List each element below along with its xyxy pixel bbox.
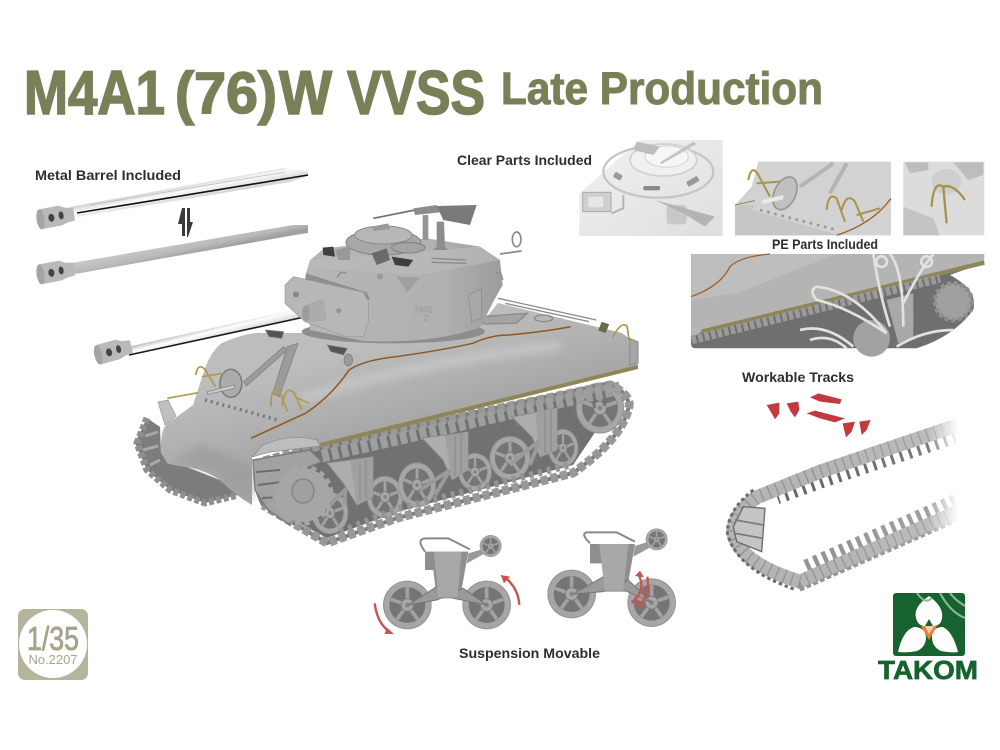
drive sprocket [276,468,330,522]
scale badge [18,609,88,680]
scale badge: No.2207 [28,652,78,667]
icon: swap arrows [178,208,193,237]
track interior [255,383,625,538]
turret: 2 [424,313,429,322]
hull highlight [300,345,560,400]
machine gun [373,205,477,250]
watermark swirls [800,254,953,348]
commander cupola [323,223,467,267]
scale badge: 1/35 [27,620,79,657]
title: Late Production [501,63,823,114]
front track links [253,450,322,525]
title: M4A1 [24,59,165,128]
road wheels [312,429,590,535]
turret number: 2401 [414,305,433,314]
gun barrel [127,307,309,356]
PE parts inset: fender [691,254,984,357]
nose shading [172,445,252,500]
title: W [279,59,332,128]
clear parts inset: turret top [579,140,723,236]
suspension diagrams [375,528,676,634]
front hull rivets [205,400,278,420]
workable tracks [727,393,958,590]
label: suspension: Suspension Movable [459,645,600,661]
red arrows [375,577,519,632]
rear plate [630,338,638,365]
mantlet [285,277,368,337]
Takom logo [878,593,978,685]
red track parts [767,393,871,437]
label: PE parts: PE Parts Included [772,236,878,252]
main tank [92,205,638,543]
plastic barrel [35,225,308,285]
title [24,59,823,128]
label: workable tracks: Workable Tracks [742,369,854,385]
gun collar [305,298,327,322]
far track [135,418,238,503]
muzzle brake [92,336,134,365]
idler wheel [576,382,624,434]
PE parts inset: handle [903,162,984,235]
Takom logo: TAKOM [878,655,978,685]
side stowage [468,288,482,322]
engine deck details [480,298,596,324]
left fender plate [158,400,176,425]
hooks [337,272,503,280]
PE parts inset: bow [735,162,891,235]
label: metal barrel: Metal Barrel Included [35,167,181,183]
left suspension [375,535,519,634]
brass handles [167,325,629,412]
title: VVSS [347,59,485,128]
bogies [327,408,557,505]
fender strip [320,365,638,447]
hull [161,303,638,505]
copper wire [251,327,571,438]
hull details [167,298,638,438]
title: (76) [175,61,277,126]
label: clear parts: Clear Parts Included [457,152,592,168]
metal barrel [35,168,308,230]
mudguard [252,437,320,457]
near track outer [255,383,629,543]
rear lift ring [500,232,522,254]
track loop [727,425,958,590]
turret [285,238,503,343]
right suspension [547,528,676,627]
